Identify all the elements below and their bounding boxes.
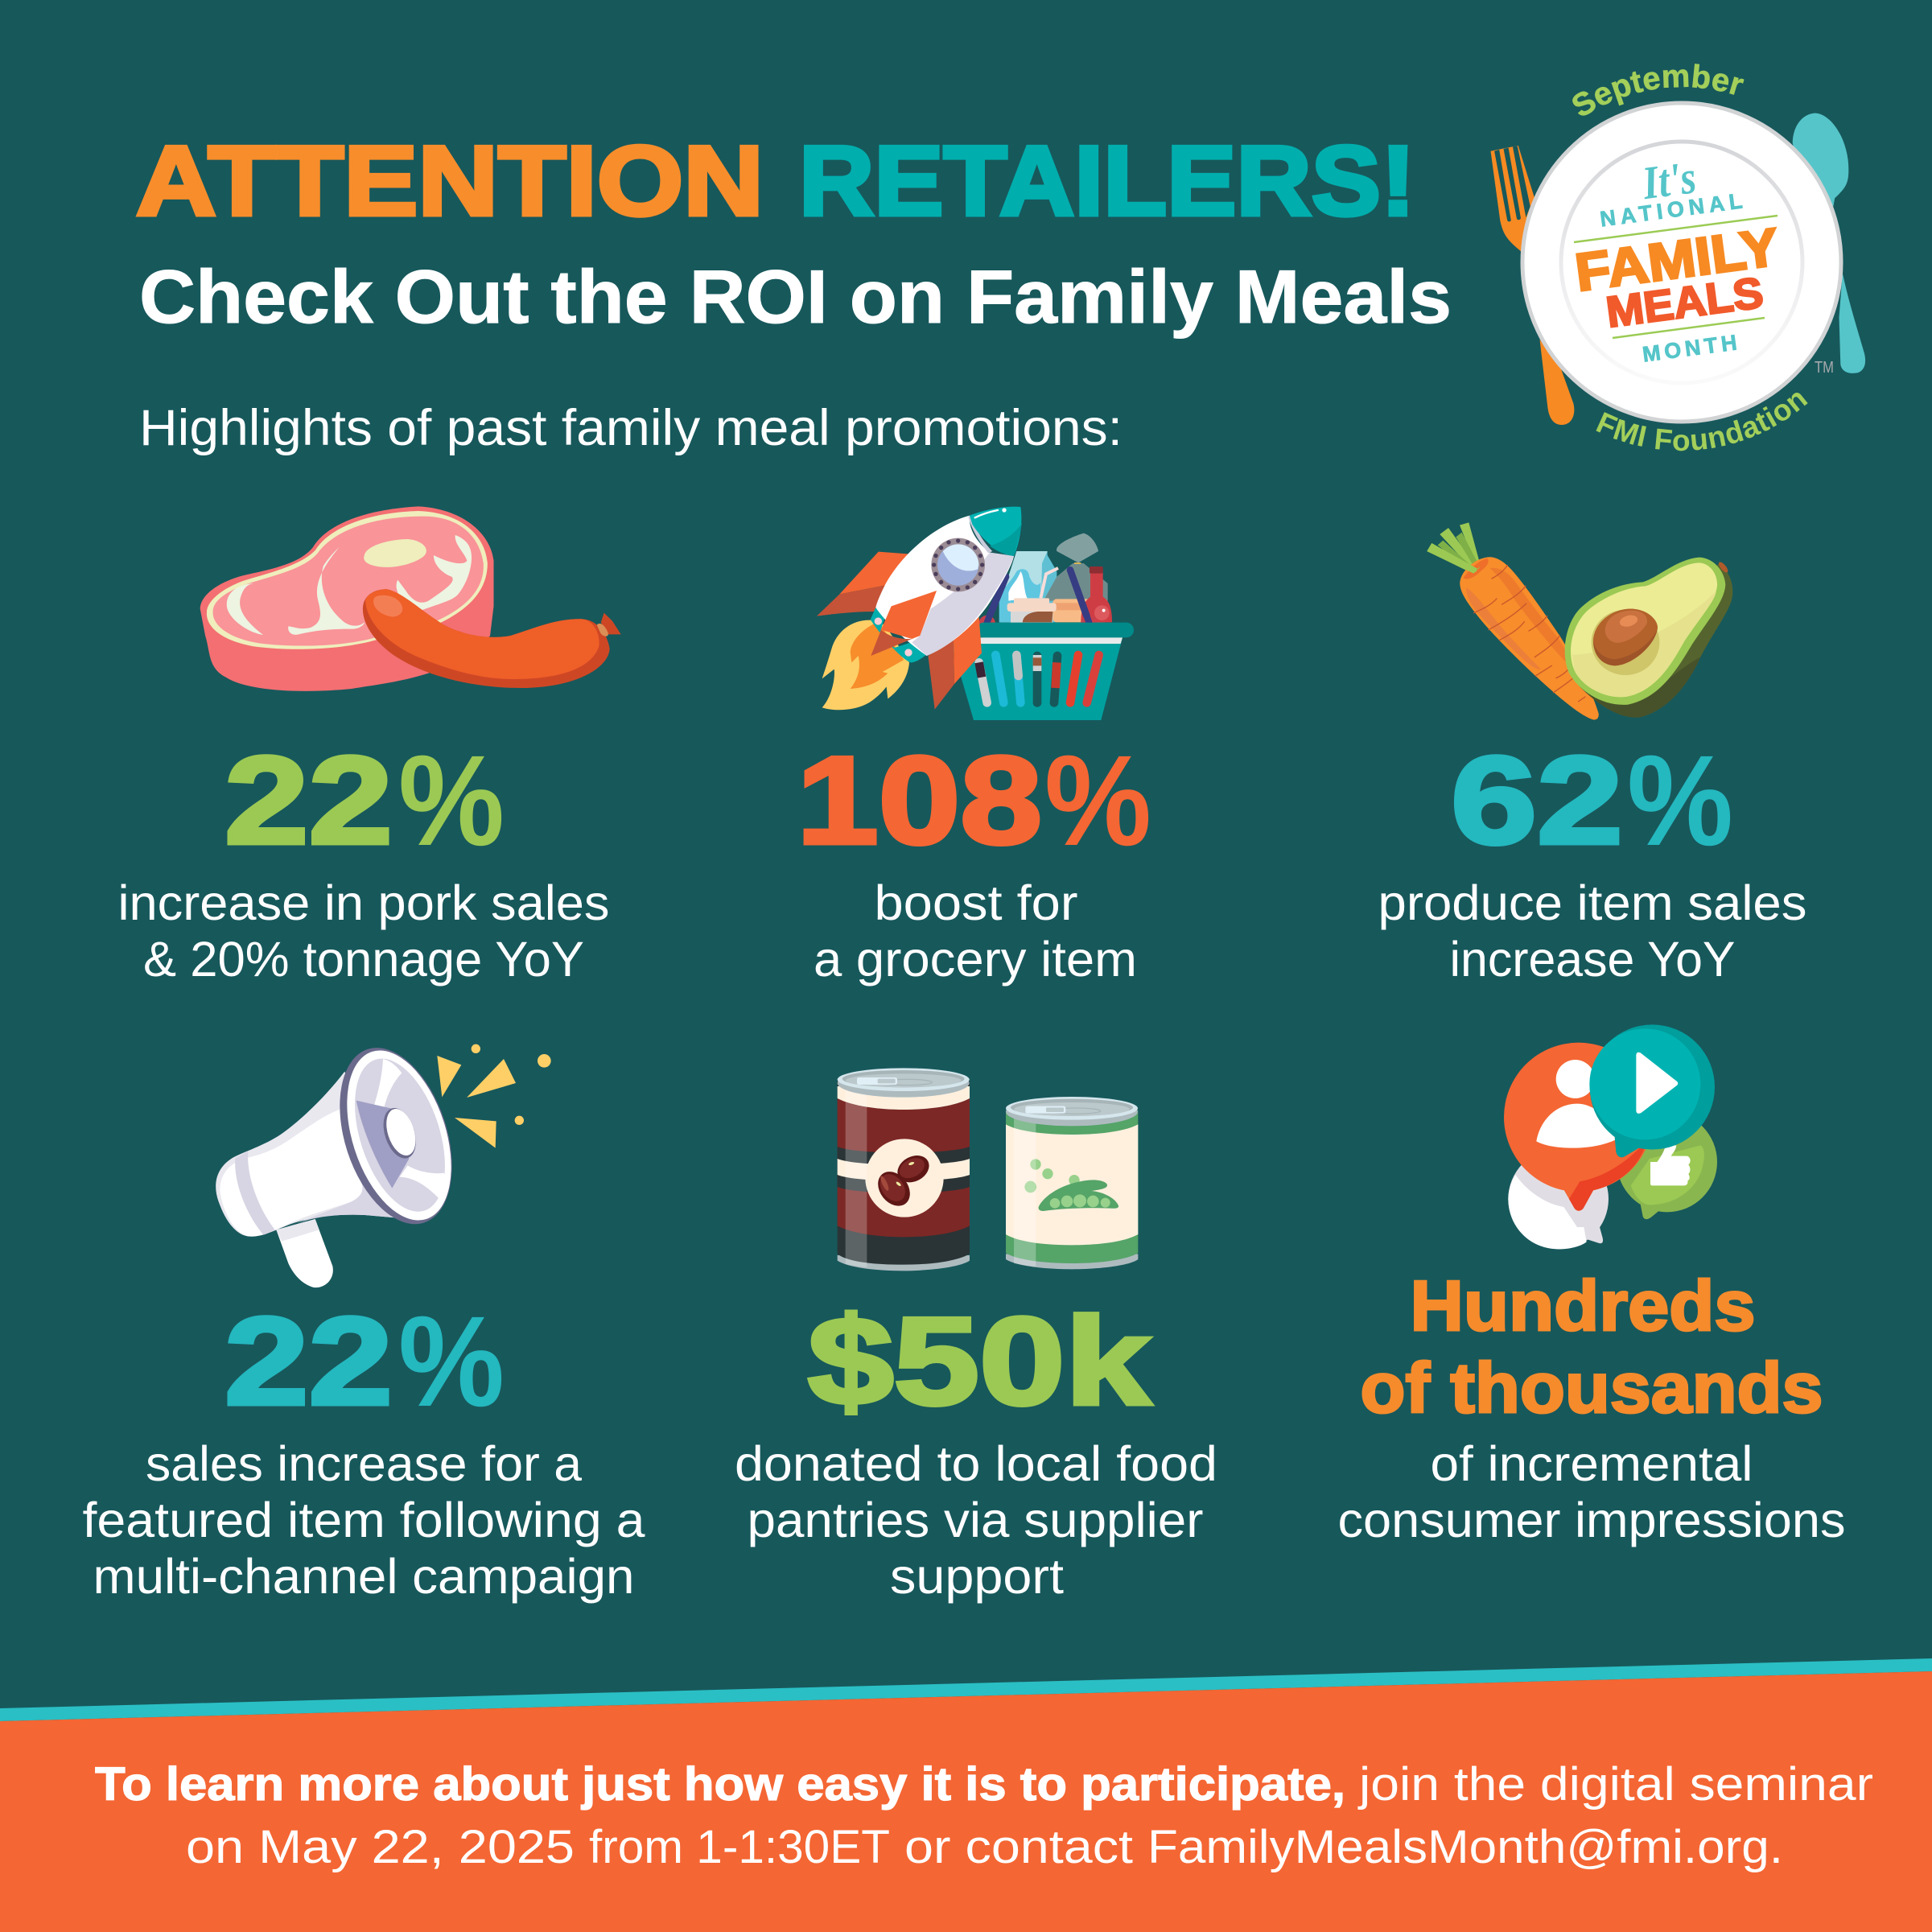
call to action text: or contact	[904, 1821, 1133, 1873]
stat: 22% pork: 22	[225, 731, 393, 870]
caption: increase YoY	[1450, 932, 1735, 987]
caption: consumer impressions	[1337, 1493, 1846, 1547]
caption	[814, 875, 1137, 987]
stat: hundreds of thousands	[1337, 1266, 1846, 1547]
caption: sales increase for a	[146, 1436, 582, 1491]
caption: boost for	[874, 875, 1078, 930]
logo wordmark: MEALS	[1604, 269, 1766, 337]
icon: carrot and avocado	[1427, 522, 1732, 719]
can: beans	[838, 1068, 970, 1271]
call to action text: FamilyMealsMonth@fmi.org.	[1147, 1821, 1783, 1873]
icon: fork and spoon	[1490, 113, 1865, 425]
stat: 22% pork	[117, 728, 610, 987]
caption	[735, 1436, 1217, 1604]
stat: 108% grocery: %	[1044, 728, 1151, 872]
stat: hundreds of thousands: of thousands	[1360, 1348, 1823, 1427]
plate	[1522, 103, 1841, 422]
caption: multi-channel campaign	[93, 1549, 634, 1604]
caption	[1337, 1436, 1846, 1547]
fmi foundation arc text: FMI Foundation	[1596, 393, 1808, 451]
title	[136, 126, 1415, 237]
stat: 22% pork: %	[398, 728, 505, 872]
icon: canned food	[838, 1068, 1138, 1271]
call to action text: To learn more about just how easy it is to participate,	[95, 1758, 1345, 1810]
caption	[117, 875, 610, 987]
can: peas	[1006, 1097, 1138, 1269]
stat: $50k donated	[735, 1291, 1217, 1604]
caption: produce item sales	[1378, 875, 1807, 930]
call to action text: on May 22, 2025	[186, 1821, 575, 1873]
title: RETAILERS!	[799, 126, 1415, 237]
stat: 22% featured item	[82, 1289, 645, 1604]
caption	[1378, 875, 1807, 987]
caption: increase in pork sales	[117, 875, 610, 930]
caption: donated to local food	[735, 1436, 1217, 1491]
icon: megaphone	[216, 1033, 551, 1287]
title: ATTENTION	[136, 126, 764, 237]
logo wordmark: NATIONAL	[1599, 189, 1744, 232]
intro line: Highlights of past family meal promotions:	[139, 400, 1123, 456]
stat: hundreds of thousands: Hundreds	[1410, 1266, 1756, 1345]
stat: 108% grocery: 108	[797, 731, 1042, 870]
logo: family meals month	[1490, 64, 1865, 451]
subtitle: Check Out the ROI on Family Meals	[139, 254, 1452, 339]
caption	[82, 1436, 645, 1604]
logo wordmark	[1572, 150, 1782, 367]
stat: 62% produce	[1378, 728, 1807, 987]
logo wordmark: FAMILY	[1572, 216, 1782, 302]
icon: rocket and grocery basket	[817, 507, 1134, 720]
caption: of incremental	[1431, 1436, 1753, 1491]
stat: 22% featured item: %	[398, 1289, 505, 1433]
call to action text	[95, 1758, 1873, 1873]
stat: 108% grocery	[797, 728, 1151, 987]
trademark: TM	[1815, 359, 1834, 377]
icon: social media bubbles	[1504, 1024, 1717, 1249]
stat: 22% featured item: 22	[225, 1291, 393, 1431]
call to action text: join the digital seminar	[1357, 1758, 1873, 1810]
caption: featured item following a	[82, 1493, 645, 1547]
footer band	[0, 1658, 1932, 1932]
stat: 62% produce: %	[1627, 728, 1733, 872]
logo wordmark: It's	[1639, 150, 1699, 209]
stat: 62% produce: 62	[1451, 731, 1623, 870]
september arc text: September	[1572, 64, 1745, 116]
call to action text: from 1-1:30ET	[589, 1821, 890, 1873]
logo wordmark: MONTH	[1641, 331, 1738, 367]
caption: a grocery item	[814, 932, 1137, 987]
caption: pantries via supplier	[747, 1493, 1204, 1547]
caption: support	[890, 1549, 1064, 1604]
icon: pork steak and sausage	[200, 506, 621, 691]
caption: & 20% tonnage YoY	[143, 932, 584, 987]
stat: $50k donated: $50k	[808, 1291, 1151, 1431]
